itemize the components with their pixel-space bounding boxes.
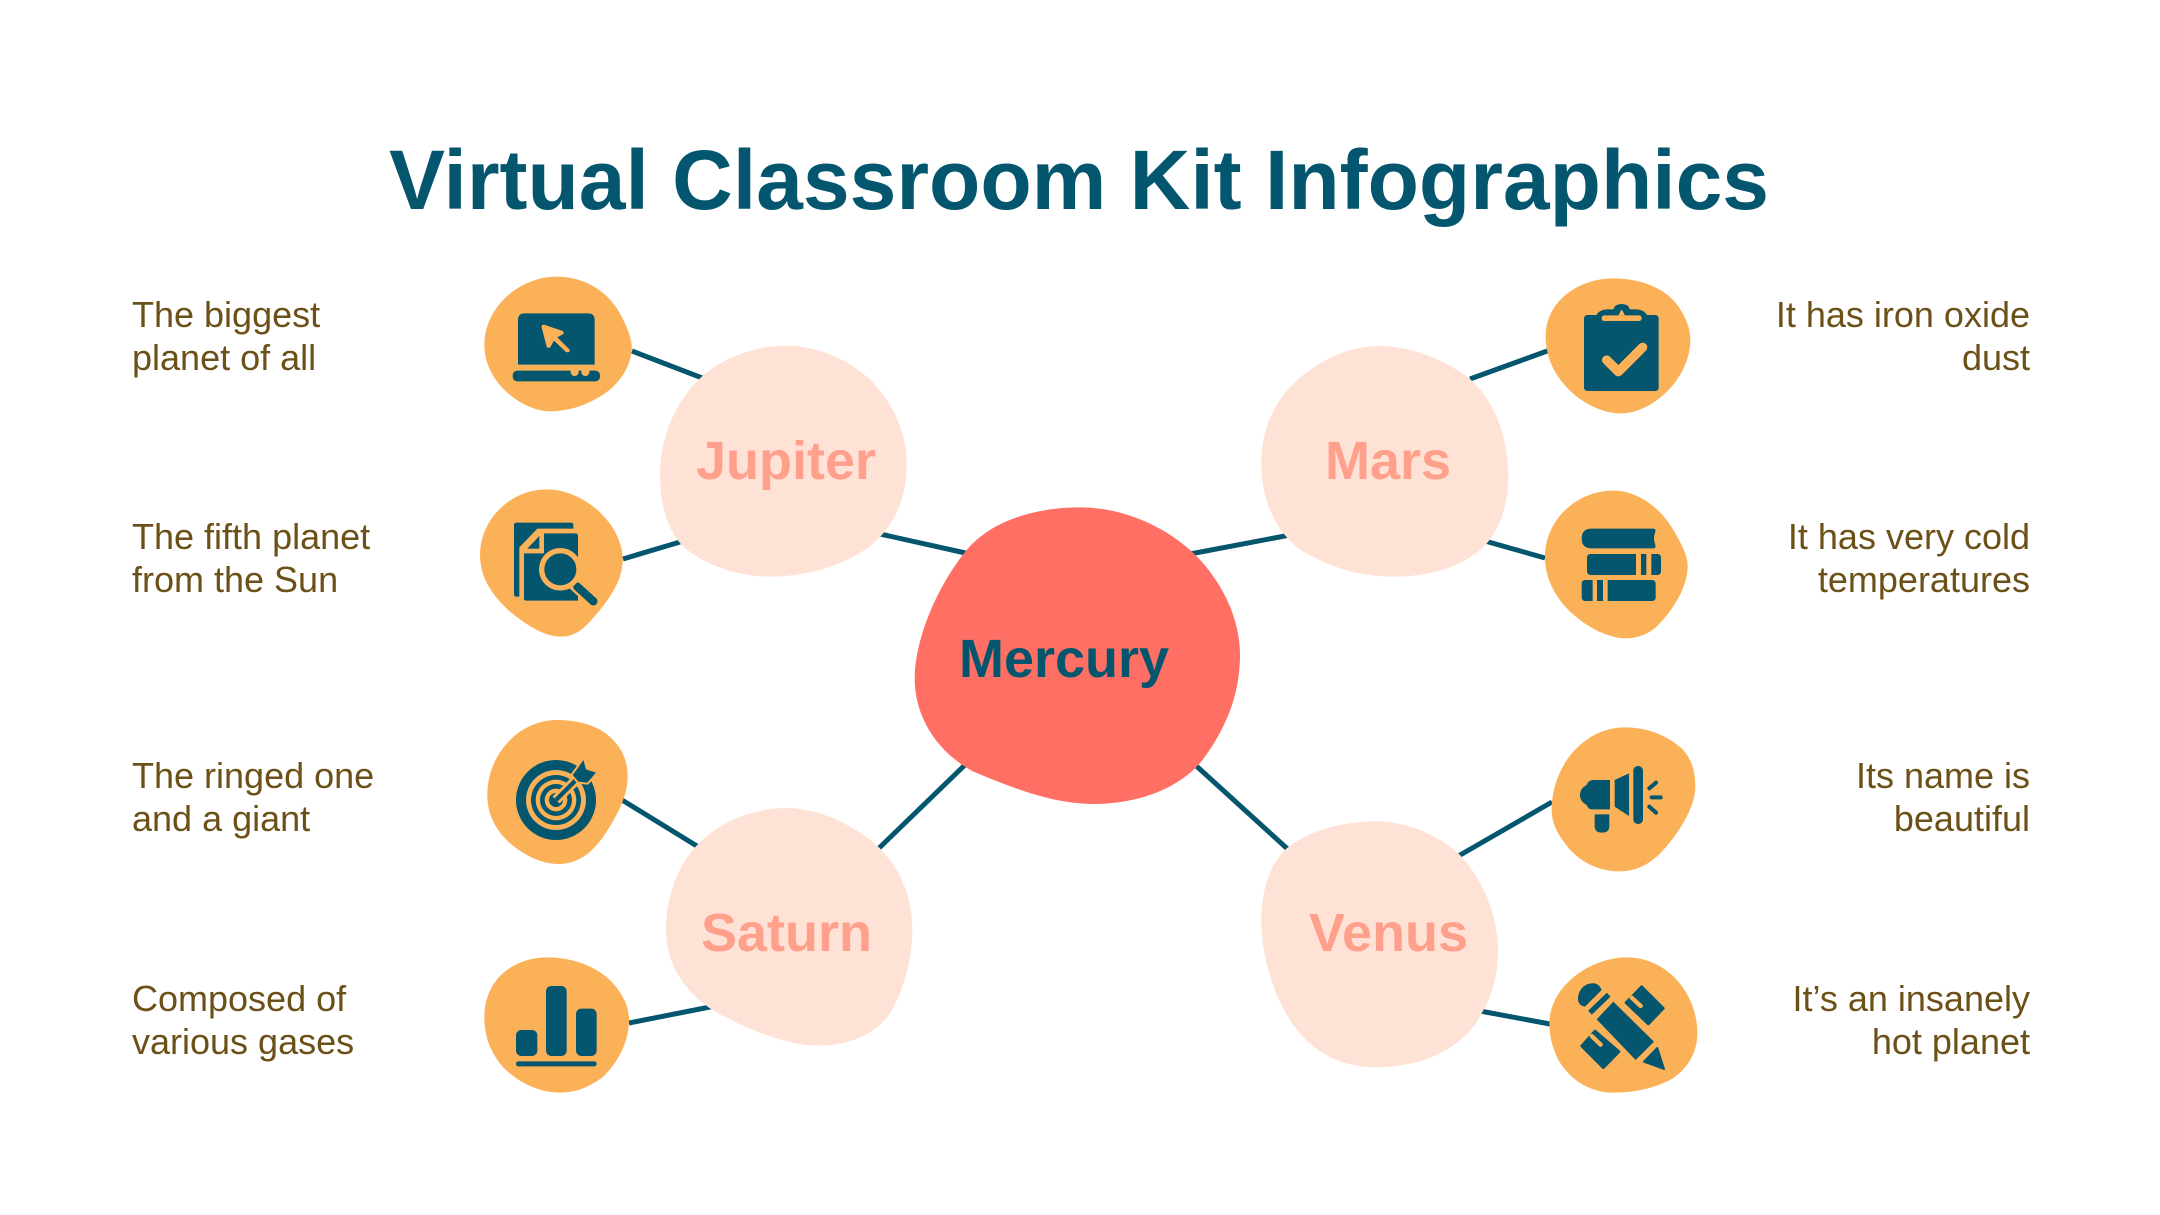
text: hot planet: It’s an insanely	[1793, 978, 2030, 1019]
icon: laptop with cursor	[484, 277, 632, 411]
node: Mars	[1261, 346, 1508, 577]
central node: Mercury	[915, 507, 1240, 804]
node: Venus	[1261, 821, 1498, 1067]
text: iron oxide: dust	[1962, 337, 2030, 378]
text: biggest planet: The biggest	[132, 294, 320, 335]
text: ringed one: The ringed one	[132, 755, 374, 796]
node: Saturn	[666, 808, 912, 1046]
text: various gases: Composed of	[132, 978, 347, 1019]
text: various gases: various gases	[132, 1021, 354, 1062]
text: hot planet: hot planet	[1872, 1021, 2030, 1062]
icon: megaphone	[1552, 727, 1695, 871]
icon: pencil and ruler	[1549, 957, 1697, 1093]
text: cold temperatures: temperatures	[1818, 559, 2030, 600]
text: cold temperatures: It has very cold	[1788, 516, 2030, 557]
text: ringed one: and a giant	[132, 798, 310, 839]
node: Venus: Venus	[1309, 903, 1468, 963]
text: beautiful name: Its name is	[1856, 755, 2030, 796]
node: Saturn: Saturn	[701, 903, 872, 963]
text: fifth planet: The fifth planet	[132, 516, 370, 557]
central node: Mercury: Mercury	[959, 629, 1169, 689]
icon: target with arrow	[487, 720, 628, 864]
text: iron oxide: It has iron oxide	[1776, 294, 2030, 335]
icon: clipboard with check	[1546, 278, 1690, 413]
node: Jupiter: Jupiter	[696, 431, 876, 491]
connector lines	[622, 350, 1552, 1024]
icon: bar chart	[484, 957, 629, 1093]
title: Virtual Classroom Kit Infographics	[389, 133, 1769, 227]
text: beautiful name: beautiful	[1894, 798, 2030, 839]
node: Jupiter	[660, 346, 907, 577]
text: biggest planet: planet of all	[132, 337, 316, 378]
icon: document with magnifier	[480, 489, 623, 637]
icon: stack of books	[1545, 491, 1688, 638]
node: Mars: Mars	[1325, 431, 1451, 491]
text: fifth planet: from the Sun	[132, 559, 338, 600]
